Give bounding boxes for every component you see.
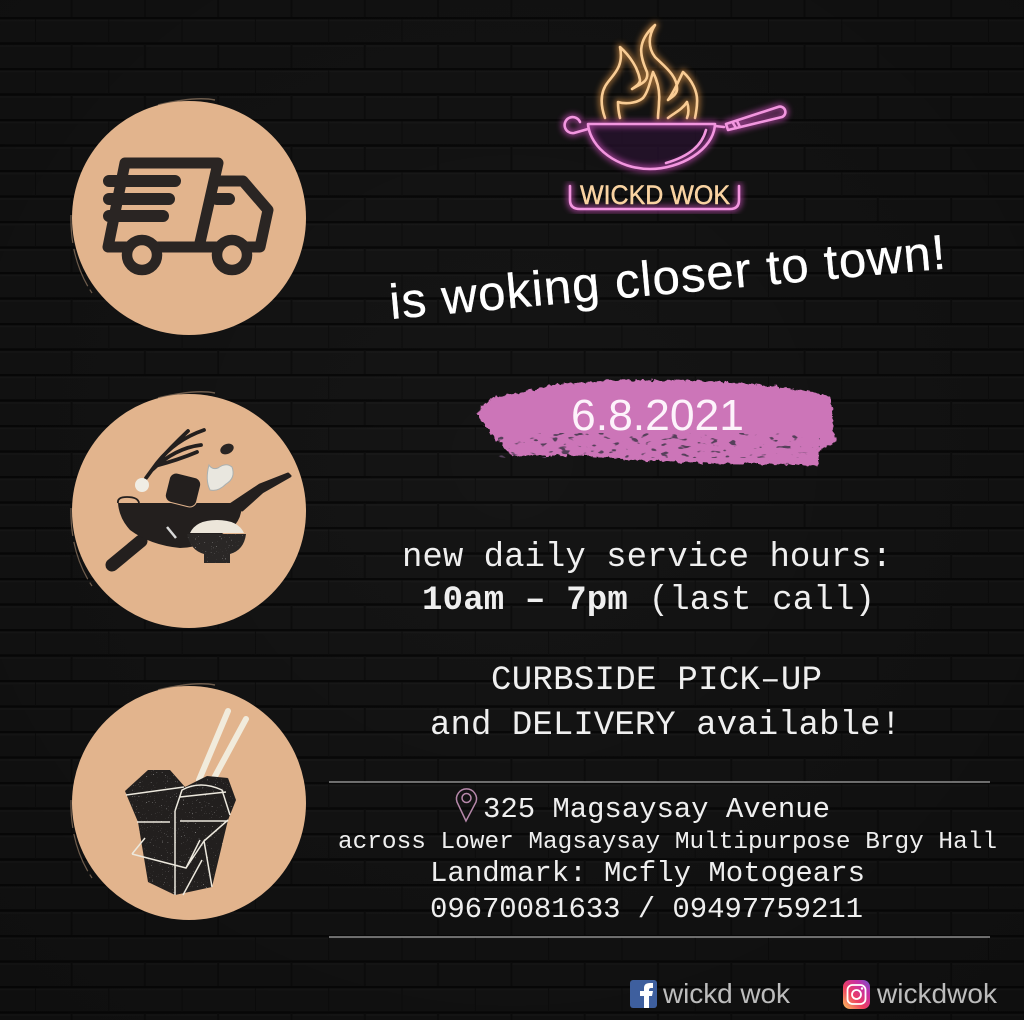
- date badge: [478, 380, 836, 466]
- logo: neon Wickd Wok: [565, 25, 785, 210]
- garlic: [207, 465, 233, 490]
- icon: instagram: [843, 980, 870, 1009]
- icon: wok with food: [112, 430, 290, 565]
- panel: takeout box circle: [71, 684, 306, 920]
- divider lines and address block: [329, 782, 997, 937]
- service hours text: new daily service hours:: [402, 539, 892, 577]
- logo wordmark: WICKD WOK: [580, 180, 730, 210]
- icon: takeout box with chopsticks: [120, 711, 246, 900]
- headline: is woking closer to town!: [387, 226, 948, 330]
- address text: 09670081633 / 09497759211: [430, 893, 863, 926]
- service hours text: [402, 539, 892, 620]
- address text: Landmark: Mcfly Motogears: [430, 857, 865, 890]
- address text: 325 Magsaysay Avenue: [483, 793, 830, 826]
- panel: delivery circle: [71, 99, 306, 335]
- icon: neon name bracket: [570, 186, 739, 209]
- icon: neon flames: [602, 25, 697, 118]
- leek: [146, 430, 204, 478]
- icon: neon wok pan: [565, 107, 785, 169]
- icon: delivery truck: [108, 163, 268, 270]
- icon: facebook: [630, 980, 657, 1008]
- service options text: and DELIVERY available!: [430, 707, 901, 745]
- icon: location pin: [456, 789, 476, 821]
- service options text: CURBSIDE PICK–UP: [491, 662, 822, 700]
- address text: across Lower Magsaysay Multipurpose Brgy Hall: [338, 829, 997, 856]
- panel: wok ingredients circle: [71, 392, 306, 628]
- date text: 6.8.2021: [571, 391, 744, 440]
- address text: [338, 793, 997, 926]
- brush stroke: [478, 380, 836, 466]
- service options text: [430, 662, 901, 745]
- service hours text: 10am – 7pm (last call): [422, 582, 875, 620]
- social: instagram: wickdwok: [876, 978, 998, 1009]
- social: facebook: wickd wok: [662, 978, 791, 1009]
